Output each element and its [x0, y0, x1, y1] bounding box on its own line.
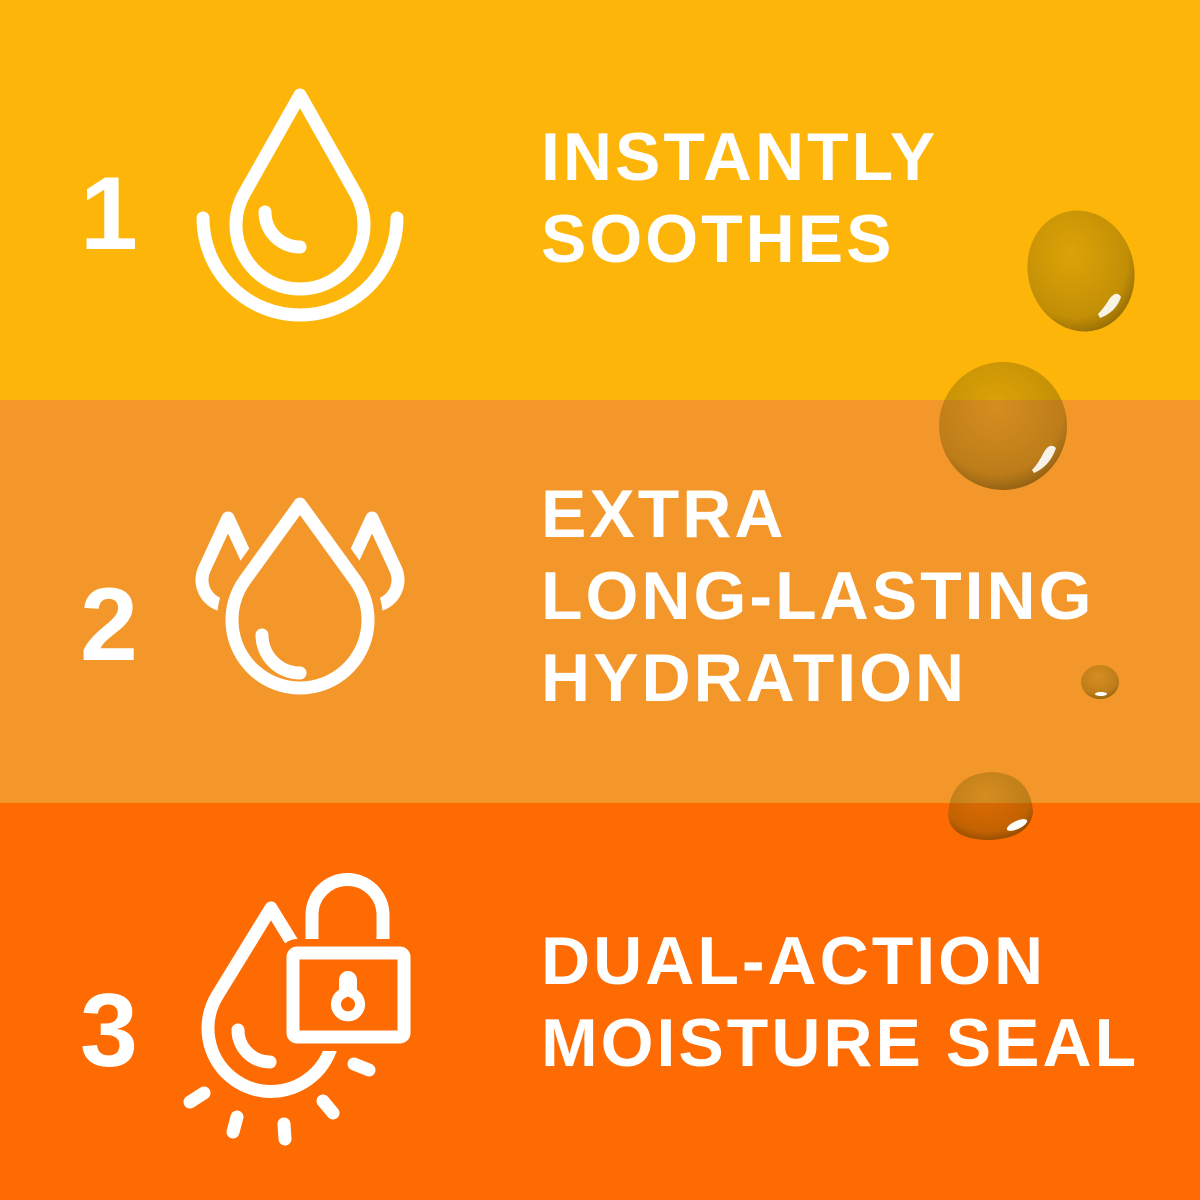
band 2	[0, 400, 1200, 803]
icon: drop with lock	[190, 879, 404, 1139]
number 1: 1	[80, 156, 138, 272]
heading 1: INSTANTLY	[541, 119, 938, 195]
heading 2: HYDRATION	[541, 640, 967, 716]
heading 2: EXTRA	[541, 476, 786, 552]
icon: drop with bowl	[203, 95, 397, 315]
band 3	[0, 803, 1200, 1200]
number 2: 2	[80, 567, 138, 683]
heading 3	[541, 923, 1139, 1081]
droplets	[939, 198, 1148, 840]
band 1	[0, 0, 1200, 400]
icon: three drops	[202, 504, 398, 688]
number 3: 3	[80, 973, 138, 1089]
heading 1: SOOTHES	[541, 201, 894, 277]
heading 1	[541, 119, 938, 277]
heading 2	[541, 476, 1095, 716]
heading 2: LONG-LASTING	[541, 558, 1095, 634]
heading 3: MOISTURE SEAL	[541, 1005, 1139, 1081]
heading 3: DUAL-ACTION	[541, 923, 1046, 999]
